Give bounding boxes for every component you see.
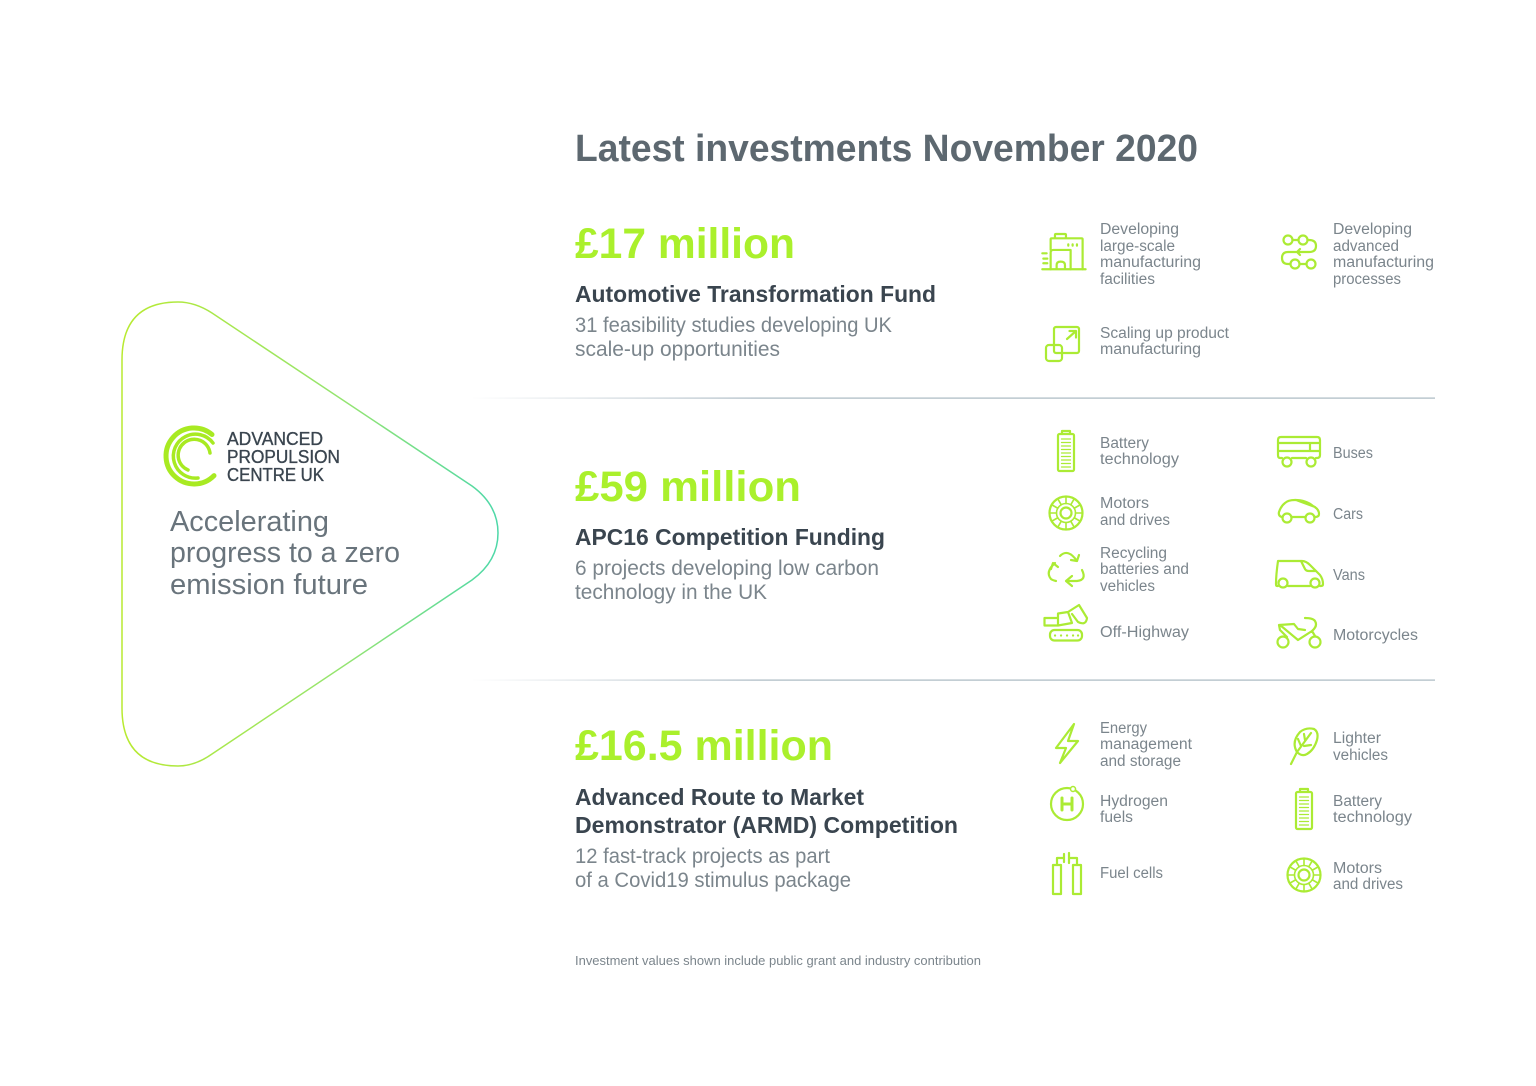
icon: leaf (1291, 728, 1318, 764)
label: motors and drives: and drives (1100, 512, 1170, 529)
amount: £59 million (575, 463, 801, 511)
fund name (575, 784, 958, 838)
label: energy management: and storage (1100, 753, 1181, 770)
label: motors and drives: Motors (1333, 860, 1382, 877)
label: motorcycles: Motorcycles (1333, 627, 1418, 644)
label: recycling: vehicles (1100, 578, 1155, 595)
label: large-scale facilities: Developing (1100, 221, 1179, 238)
fund name: Advanced Route to Market (575, 784, 864, 810)
description: 12 fast-track projects as part (575, 845, 830, 868)
label: scaling up: manufacturing (1100, 341, 1201, 358)
label: motors and drives (1100, 495, 1170, 529)
label: battery technology: Battery (1333, 793, 1382, 810)
icon: factory (1042, 234, 1086, 269)
label: scaling up (1100, 325, 1230, 358)
icon: van (1276, 561, 1323, 588)
icon: recycling (1049, 553, 1084, 586)
label: off-highway: Off-Highway (1100, 624, 1189, 641)
label: hydrogen fuels: Hydrogen (1100, 793, 1168, 810)
amount: £16.5 million (575, 722, 833, 770)
description (575, 557, 879, 604)
icon: fuel cells (1053, 853, 1081, 894)
section: APC16 Competition Funding (575, 463, 885, 604)
label: buses: Buses (1333, 445, 1373, 462)
label: recycling: Recycling (1100, 545, 1167, 562)
label: large-scale facilities: large-scale (1100, 238, 1175, 255)
section: ARMD Competition (575, 722, 958, 892)
description (575, 845, 851, 892)
icon: battery (1058, 431, 1074, 471)
label: motors and drives: and drives (1333, 876, 1403, 893)
label: recycling (1100, 545, 1189, 595)
description: 31 feasibility studies developing UK (575, 314, 892, 337)
strapline (170, 506, 400, 601)
label: large-scale facilities: facilities (1100, 271, 1155, 288)
label: advanced processes: advanced (1333, 238, 1399, 255)
label: battery technology (1333, 793, 1412, 826)
label: lighter vehicles: Lighter (1333, 730, 1381, 747)
label: hydrogen fuels (1100, 793, 1168, 826)
fund name: Automotive Transformation Fund (575, 281, 936, 307)
title: Latest investments November 2020 (575, 128, 1198, 170)
amount: £17 million (575, 220, 795, 268)
label: motors and drives (1333, 860, 1403, 893)
icon: car (1279, 500, 1319, 522)
strapline: progress to a zero (170, 537, 400, 569)
label: advanced processes: Developing (1333, 221, 1412, 238)
logo wordmark: CENTRE UK (227, 465, 324, 485)
icon: battery (1296, 789, 1312, 829)
icon: lightning bolt (1056, 724, 1078, 763)
icon: manufacturing process (1282, 236, 1316, 268)
fund name: APC16 Competition Funding (575, 524, 885, 550)
icon: hydrogen (1051, 786, 1083, 820)
logo wordmark: ADVANCED (227, 429, 323, 449)
label: advanced processes: processes (1333, 271, 1401, 288)
label: scaling up: Scaling up product (1100, 325, 1230, 342)
description: technology in the UK (575, 581, 767, 604)
strapline: emission future (170, 569, 368, 601)
label: lighter vehicles: vehicles (1333, 747, 1388, 764)
icon: motor (1288, 858, 1320, 892)
section: Automotive Transformation Fund (575, 220, 936, 361)
description (575, 314, 892, 361)
label: hydrogen fuels: fuels (1100, 809, 1133, 826)
icon: motor (1050, 496, 1082, 530)
description: scale-up opportunities (575, 338, 780, 361)
label: fuel cells: Fuel cells (1100, 865, 1163, 882)
label: energy management (1100, 720, 1193, 770)
icon: motorcycle (1278, 618, 1320, 648)
label: vans: Vans (1333, 567, 1365, 584)
logo wordmark (227, 429, 340, 485)
icon: excavator (1044, 605, 1087, 640)
label: recycling: batteries and (1100, 561, 1189, 578)
icon: APC logo mark (166, 428, 214, 484)
label: battery technology: technology (1333, 809, 1412, 826)
footnote: Investment values shown include public grant and industry contribution (575, 953, 981, 968)
label: motors and drives: Motors (1100, 495, 1149, 512)
label: lighter vehicles (1333, 730, 1388, 764)
label: large-scale facilities: manufacturing (1100, 254, 1201, 271)
icon: bus (1278, 437, 1320, 466)
description: 6 projects developing low carbon (575, 557, 879, 580)
label: advanced processes (1333, 221, 1434, 288)
label: energy management: Energy (1100, 720, 1147, 737)
label: cars: Cars (1333, 506, 1363, 523)
icon: scaling up (1046, 327, 1079, 361)
panel: triangle badge (122, 302, 498, 766)
fund name: Demonstrator (ARMD) Competition (575, 812, 958, 838)
label: battery technology: technology (1100, 451, 1179, 468)
label: battery technology (1100, 435, 1179, 468)
label: advanced processes: manufacturing (1333, 254, 1434, 271)
logo wordmark: PROPULSION (227, 447, 340, 467)
label: energy management: management (1100, 736, 1193, 753)
description: of a Covid19 stimulus package (575, 869, 851, 892)
label: large-scale facilities (1100, 221, 1201, 288)
label: battery technology: Battery (1100, 435, 1149, 452)
strapline: Accelerating (170, 506, 329, 538)
